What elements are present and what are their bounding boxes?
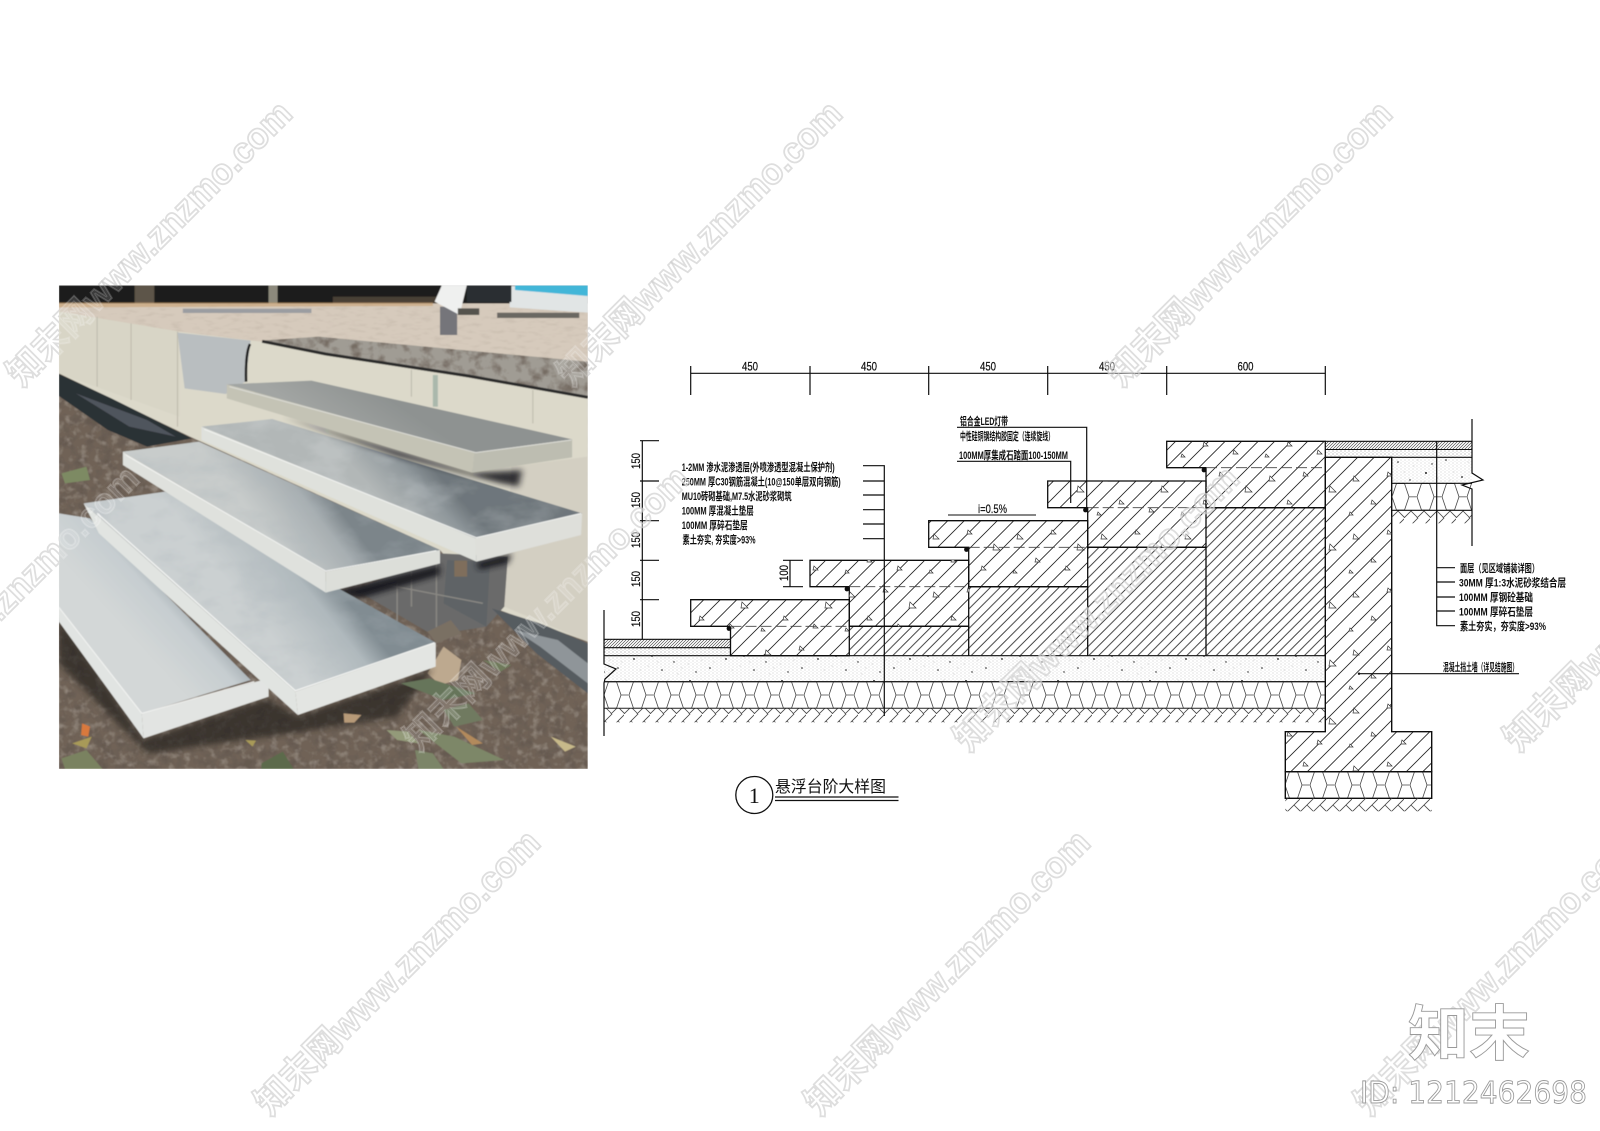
top dimension chain: 450 (980, 360, 996, 374)
black fabric left (59, 374, 192, 447)
block pier under steps (368, 553, 508, 632)
pool edge top right (510, 286, 588, 313)
slope note (948, 502, 1036, 516)
leader and notes: paving build-up: 100MM 厚碎石垫层 (1459, 604, 1533, 618)
leader and notes: LED strip: 铝合金LED灯带 (960, 414, 1008, 428)
icon: detail number circle: 1 (749, 783, 760, 808)
leader and notes: step build-up: 100MM 厚混凝土垫层 (682, 504, 754, 518)
slope note: i=0.5% (978, 502, 1007, 516)
concrete retaining wall (59, 312, 588, 642)
leader and notes: step build-up: 素土夯实, 夯实度>93% (682, 532, 756, 546)
logo: outlined wordmark: 知末 (1408, 1001, 1530, 1068)
right section edge with break mark (1462, 419, 1483, 546)
leader and notes: step build-up: 100MM 厚碎石垫层 (682, 518, 748, 532)
title: detail number and name: 悬浮台阶大样图 (775, 778, 886, 796)
panel: photo of floating concrete steps (59, 285, 588, 769)
title: detail number and name (736, 776, 898, 814)
post (440, 307, 457, 335)
watermarks: diagonal site name: 知末网www.znzmo.com (946, 457, 1247, 759)
paving and ground layers right (1325, 441, 1472, 523)
step 2 (84, 492, 436, 715)
leader and note: retaining wall: 混凝土挡土墙（详见结施图） (1443, 660, 1518, 674)
left dimension chain: 150 (629, 571, 643, 587)
left dimension chain: 150 (629, 492, 643, 508)
step 4 (201, 419, 582, 562)
dimension 100: 100 (777, 565, 791, 581)
watermarks: faint copies over the photo: 知末网www.znzmo.com (396, 457, 697, 759)
leader and notes: paving build-up: 素土夯实，夯实度>93% (1460, 619, 1546, 633)
step 1 (59, 513, 269, 738)
grey membrane sheet (177, 333, 251, 394)
image id: ID: 1212462698 (1360, 1076, 1587, 1111)
panel: section drawing of floating steps (604, 360, 1566, 811)
fallen leaves (61, 467, 576, 769)
shadows under steps (476, 553, 511, 570)
watermarks: diagonal site name: 知末网www.znzmo.com (247, 821, 548, 1123)
step 5 (227, 381, 572, 473)
ground layers left (604, 656, 1325, 722)
step 2 section (810, 560, 969, 626)
black fabric right (492, 608, 588, 693)
step 1 section (691, 600, 849, 656)
background trees (59, 285, 588, 304)
shadow of top step on step below (283, 417, 522, 487)
top dimension chain: 450 (742, 360, 758, 374)
top dimension chain (691, 360, 1325, 395)
watermarks: faint copies over the photo: 知末网www.znzmo.com (0, 92, 300, 394)
watermarks: faint copies over the photo (59, 286, 588, 754)
dark top edge slab (261, 337, 588, 398)
left dimension chain: 150 (629, 611, 643, 627)
upper ground surface (59, 302, 588, 378)
leader and notes: paving build-up: 30MM 厚1:3水泥砂浆结合层 (1459, 576, 1566, 590)
icon: detail number circle (736, 776, 773, 814)
brick bases (849, 508, 1325, 656)
stone rubble (427, 620, 461, 643)
left section edge with break mark (604, 610, 616, 736)
left dimension chain: 150 (629, 532, 643, 548)
ground base (59, 285, 588, 769)
leader and notes: step build-up: 250MM 厚C30钢筋混凝土(10@150单层双向钢筋) (682, 474, 841, 488)
watermarks: diagonal site name: 知末网www.znzmo.com (797, 821, 1098, 1123)
step 3 (123, 442, 440, 593)
leader and notes: step build-up: 1-2MM 渗水泥渗透层(外喷渗透型混凝土保护剂) (682, 460, 835, 474)
leader and notes: LED strip: 100MM厚集成石踏面100-150MM (959, 448, 1068, 462)
watermarks: diagonal site name: 知末网www.znzmo.com (1099, 92, 1400, 394)
paving left (604, 639, 730, 656)
step 5 section (1167, 441, 1325, 508)
dark soil under steps (59, 617, 433, 753)
watermarks: diagonal site name: 知末网www.znzmo.com (549, 92, 850, 394)
leader and notes: paving build-up: 面层（见区域铺装详图） (1460, 561, 1539, 575)
leader and notes: LED strip (957, 414, 1087, 508)
top dimension chain: 450 (1099, 360, 1115, 374)
retaining wall section (1285, 457, 1432, 811)
leader and notes: LED strip: 中性硅铜钢结构胶固定（连续旋线） (960, 429, 1054, 443)
step 4 section (1048, 481, 1206, 547)
watermarks: faint copies over the photo: 知末网www.znzmo.com (549, 92, 850, 394)
left dimension chain (629, 441, 659, 639)
leader and notes: paving build-up: 100MM 厚钢砼基础 (1459, 590, 1533, 604)
top dimension chain: 450 (861, 360, 877, 374)
step 3 section (929, 521, 1088, 587)
dimension 100 (777, 560, 803, 587)
watermarks: diagonal site name: 知末网www.znzmo.com (0, 92, 300, 394)
leader and notes: step build-up (682, 460, 884, 716)
left dimension chain: 150 (629, 453, 643, 469)
top dimension chain: 600 (1238, 360, 1254, 374)
leader and notes: paving build-up (1437, 441, 1566, 633)
watermarks: diagonal site name: 知末网www.znzmo.com (396, 457, 697, 759)
leader and notes: step build-up: MU10砖砌基础,M7.5水泥砂浆砌筑 (682, 489, 792, 503)
